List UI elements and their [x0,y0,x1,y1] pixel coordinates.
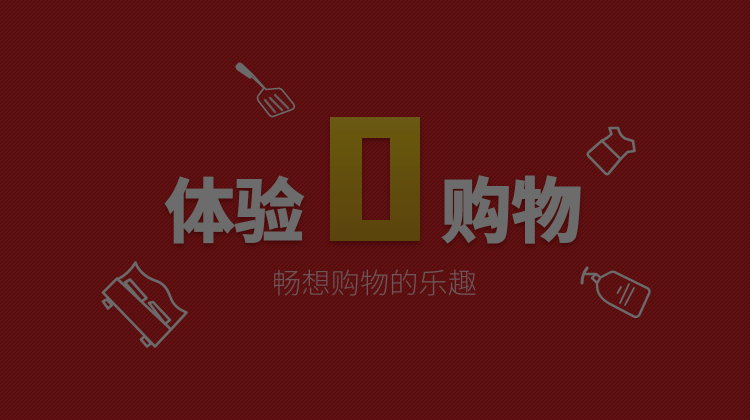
big zero block [330,117,420,241]
subtitle: 畅想购物的乐趣 [272,268,477,299]
title right: 购物: 购物 [441,173,582,251]
icon: spatula [236,63,294,116]
icon: toaster [103,262,186,346]
icon: jug [588,128,634,174]
icon: pump bottle [582,268,649,317]
title left: 体验: 体验 [165,174,304,251]
